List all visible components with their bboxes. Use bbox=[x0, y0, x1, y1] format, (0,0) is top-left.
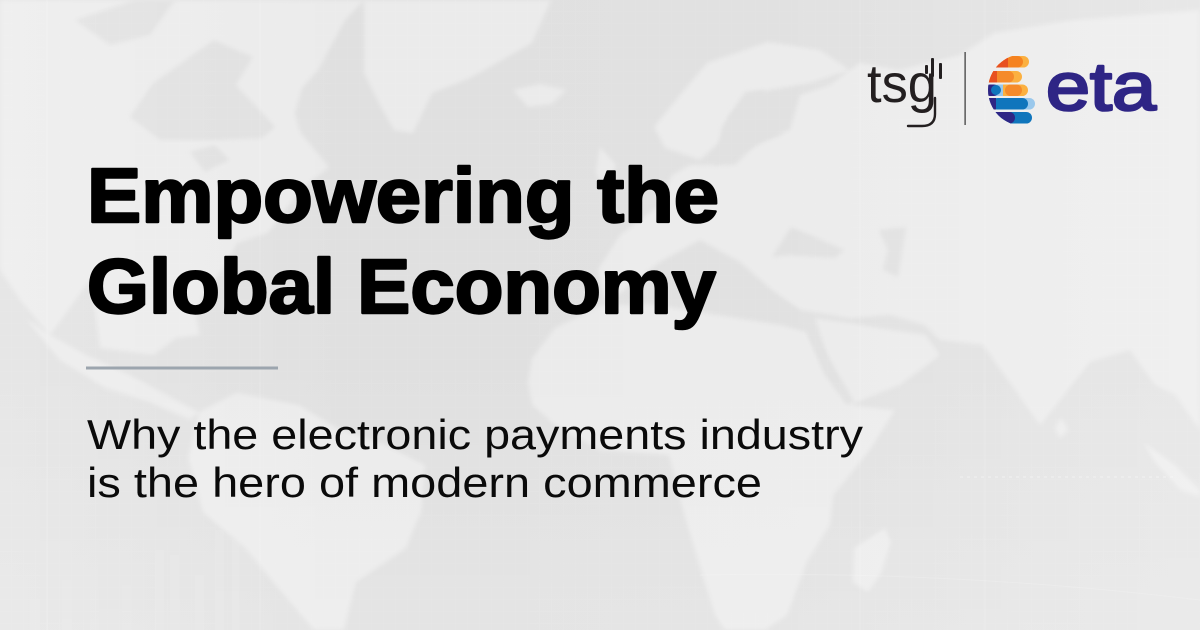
Greenland bbox=[364, 0, 551, 133]
North America bbox=[0, 0, 364, 355]
title bbox=[87, 153, 719, 330]
Mediterranean Sea bbox=[625, 250, 800, 312]
Arctic channels bbox=[75, 0, 175, 45]
Arabia bbox=[815, 318, 940, 405]
faint market bars bbox=[30, 530, 239, 630]
Baltic Sea bbox=[715, 90, 785, 165]
Great Britain bbox=[596, 147, 616, 190]
Eurasia bbox=[598, 10, 1200, 430]
subtitle line 2: is the hero of modern commerce bbox=[87, 459, 762, 506]
Hudson Bay bbox=[130, 40, 275, 140]
Africa bbox=[528, 304, 895, 630]
title line 1: Empowering the bbox=[87, 153, 719, 239]
Scandinavia bbox=[654, 42, 849, 160]
divider rule bbox=[86, 366, 278, 370]
logo: tsg: tsg bbox=[867, 54, 937, 114]
Great Lakes bbox=[190, 145, 230, 172]
subtitle bbox=[87, 411, 863, 506]
subtitle line 1: Why the electronic payments industry bbox=[87, 411, 863, 458]
Iceland bbox=[513, 84, 566, 107]
Sri Lanka bbox=[1055, 418, 1068, 438]
Sumatra bbox=[1143, 442, 1200, 497]
title line 2: Global Economy bbox=[87, 244, 716, 330]
Caspian Sea bbox=[879, 227, 906, 277]
South America bbox=[188, 393, 425, 630]
Madagascar bbox=[853, 528, 891, 592]
Central America bbox=[25, 318, 199, 420]
logo: eta globe bbox=[985, 56, 1035, 124]
inland seas bbox=[75, 0, 906, 405]
Black Sea bbox=[772, 227, 845, 258]
Red Sea bbox=[807, 332, 855, 405]
logo: eta wordmark: eta bbox=[1046, 49, 1156, 125]
logo separator bbox=[964, 52, 966, 125]
